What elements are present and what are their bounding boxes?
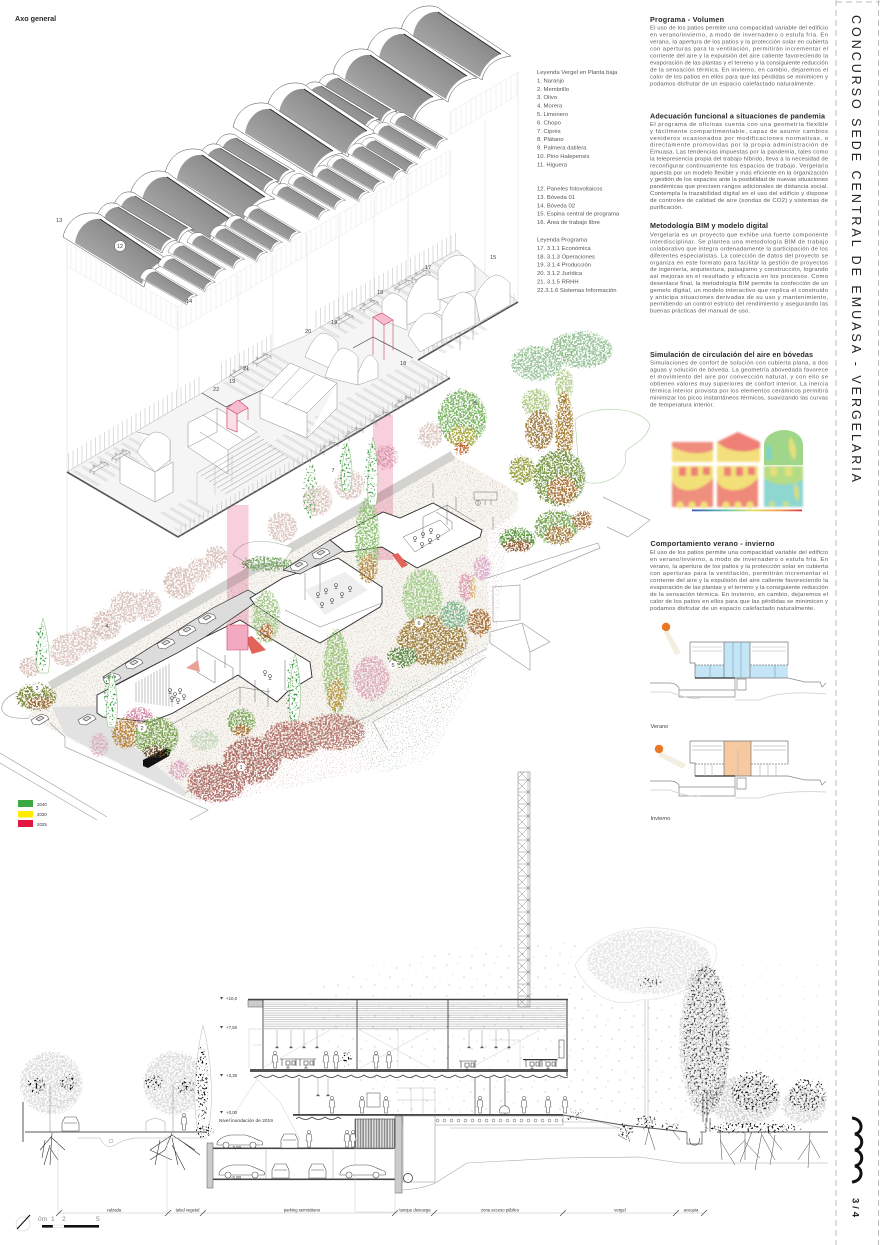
text block: Programa - Volumen <box>650 15 829 88</box>
chairs south <box>168 670 272 704</box>
chairs middle <box>316 584 352 608</box>
text block: Adecuación funcional: reconfigurar continuamente los espacios de trabajo. Vergelaria <box>650 163 829 169</box>
text block: Adecuación funcional: apuesta por un modelo flexible y más eficiente en la organización <box>650 170 828 176</box>
text block: Metodología BIM: así mejoras en el resultado y eficacia en los procesos. Como <box>650 274 829 280</box>
perimeter ticks <box>67 232 518 537</box>
white canopy blob with fringe <box>233 541 294 571</box>
text block: Simulación de circulación: aguas y solución de bóveda. La geometría abovedada favorece <box>650 368 829 374</box>
legend: planting and programme: 8. Plátano <box>537 137 564 143</box>
legend: planting and programme: Leyenda Vergel en Planta baja <box>537 70 618 76</box>
roof facade <box>67 72 518 330</box>
tree labels: 5 <box>391 663 395 669</box>
phasing colour legend: 2030 <box>37 812 47 817</box>
text block: Metodología BIM: Metodología BIM y modelo digital <box>650 221 768 230</box>
desk rows <box>72 257 490 532</box>
vault upper <box>764 430 803 465</box>
street <box>23 1102 207 1146</box>
floor and roof numbers: 18 <box>377 290 383 296</box>
level markers: -5,80 <box>231 1175 242 1180</box>
phasing colour legend <box>18 800 47 827</box>
floor and roof numbers: 19 <box>229 379 235 385</box>
north arrow <box>16 1215 30 1231</box>
office plant <box>342 1052 354 1064</box>
scale bar <box>38 1216 100 1228</box>
right ground line and acequia <box>450 1115 828 1145</box>
transmission tower <box>518 772 530 1007</box>
text block: Comportamiento verano - invierno: El uso de los patios permite una compacidad variable del edificio <box>650 550 829 556</box>
text block: Metodología BIM: y anticipa situaciones derivadas de su uso y mantenimiento, <box>650 295 828 301</box>
grey floor middle <box>305 572 368 615</box>
tree 1 large pink canopy <box>188 714 366 802</box>
legend: planting and programme: 13. Bóveda 01 <box>537 195 575 201</box>
heading: Axo general: Axo general <box>15 14 56 23</box>
flat roof lower <box>672 466 713 508</box>
roots left <box>40 1133 200 1170</box>
legend: planting and programme: 22.3.1.6 Sistemas Información <box>537 288 617 294</box>
ground floor site <box>0 332 650 820</box>
shaft base <box>227 625 248 650</box>
text block: Adecuación funcional: Contempla la trazabilidad digital en el uso del edificio y dispone <box>650 191 829 197</box>
shrub right one <box>709 1072 781 1124</box>
scale bar: 0m <box>38 1216 47 1223</box>
text block: Adecuación funcional <box>650 112 829 211</box>
text block: Metodología BIM <box>650 221 829 315</box>
text block: Simulación de circulación: el movimiento del aire por convección natural, y con ello se <box>650 375 829 381</box>
ground plants right <box>567 1110 805 1136</box>
section zone labels <box>107 1208 699 1212</box>
tree labels: 2 <box>140 726 144 732</box>
roots right <box>618 1125 820 1170</box>
red stairs <box>245 553 408 654</box>
ground speckle <box>28 455 518 806</box>
legend: planting and programme: 19. 3.1.4 Producción <box>537 263 591 269</box>
legend: planting and programme: 16. Área de trabajo libre <box>537 219 601 226</box>
text block: Metodología BIM: diferentes especialistas. La colección de datos del proyecto se <box>650 253 829 259</box>
text block: Comportamiento verano - invierno: Comportamiento verano - invierno <box>650 539 775 548</box>
legend: planting and programme: 1. Naranjo <box>537 78 565 84</box>
dimension line <box>56 1135 707 1216</box>
text block: Metodología BIM: Vergelaria es un proyecto que exhibe una fuerte componente <box>650 233 829 239</box>
text block: Metodología BIM: desenlace final, la metodología BIM permite la confección de un <box>650 281 828 287</box>
terrain curve <box>402 1157 828 1190</box>
middle block <box>250 540 382 643</box>
floor and roof numbers: 17 <box>425 265 431 271</box>
tree 5 and 6 cluster <box>388 569 492 667</box>
text block: Adecuación funcional: Adecuación funcional a situaciones de pandemia <box>650 112 826 120</box>
diagram: winter behaviour <box>650 741 826 798</box>
sun summer <box>662 623 670 631</box>
building section winter <box>690 741 788 776</box>
upper vault row <box>63 6 511 287</box>
interior lines winter <box>692 746 786 776</box>
text block: Simulación de circulación: obtienen valores muy superiores de confort interior. La inercia <box>650 382 829 388</box>
legend: planting and programme: 11. Higuera <box>537 162 568 168</box>
section zone labels: parking semisótano <box>284 1208 321 1212</box>
text block: Programa - Volumen: El uso de los patios permite una compacidad variable del edificio <box>650 26 829 32</box>
pink service shafts <box>227 415 393 650</box>
legend: planting and programme: 20. 3.1.2 Jurídica <box>537 271 583 277</box>
poplar tree <box>680 964 731 1122</box>
sky stipple right <box>560 960 830 1120</box>
legend: planting and programme: 17. 3.1.1 Económica <box>537 246 591 252</box>
scale bar: 2 <box>62 1216 66 1223</box>
building section <box>21 772 830 1216</box>
plaza furniture <box>433 483 497 530</box>
cypress section <box>195 1025 216 1137</box>
text block: Simulación de circulación: minimizar los picos instantáneos térmicos, suavizando las curvas <box>650 396 828 402</box>
shelving stacks <box>197 436 288 505</box>
roof numbers: 12 <box>117 244 123 250</box>
text block: Simulación de circulación: térmica interior provista por los elementos cerámicos permitirá <box>650 389 829 395</box>
tree labels: 4 <box>105 624 109 630</box>
ground floor of building <box>293 1078 568 1125</box>
legend: planting and programme: 2. Membrillo <box>537 87 570 93</box>
flat roof upper <box>672 442 713 462</box>
gable roof lower <box>717 466 758 508</box>
building upper floor <box>230 1000 568 1140</box>
section zone labels: zona acceso público <box>481 1208 520 1212</box>
roof numbers <box>56 218 192 305</box>
wall trees <box>20 423 443 677</box>
text block: Simulación de circulación <box>650 350 829 409</box>
ground and basement summer <box>650 678 826 700</box>
slab <box>67 250 518 537</box>
rooms <box>120 290 473 502</box>
legend: planting and programme: 12. Paneles fotovoltaicos <box>537 186 603 192</box>
slab edge <box>67 302 518 537</box>
floor and roof numbers: 19 <box>331 320 337 326</box>
office vaults <box>137 255 510 472</box>
diagram: summer behaviour <box>650 623 826 700</box>
pink garden planting <box>91 556 492 780</box>
text block: Adecuación funcional: purificación. <box>650 205 683 211</box>
text block: Metodología BIM: organiza en este formato para facilitar la gestión de proyectos <box>650 260 828 266</box>
text block: Comportamiento verano - invierno: corriente del aire y la expulsión del aire caliente favoreciendo la <box>650 578 829 584</box>
level markers: +10,0 <box>226 996 238 1001</box>
street cars and pedestrian <box>62 1113 187 1132</box>
shaft on floor <box>227 313 393 432</box>
tree labels: 6 <box>417 621 421 627</box>
floor and roof numbers: 18 <box>400 361 406 367</box>
legend: planting and programme <box>537 70 620 294</box>
tree labels: 7 <box>331 468 335 474</box>
shrub right two <box>783 1079 828 1123</box>
text block: Programa - Volumen: evaporación de las plantas y el terreno y la consiguiente reducción <box>650 61 828 67</box>
text block: Simulación de circulación: Simulación de circulación del aire en bóvedas <box>650 350 813 359</box>
section zone labels: acequia <box>684 1208 699 1212</box>
text block: Comportamiento verano - invierno: de la sensación térmica. En invierno, en cambio, dejaremos el <box>650 592 828 598</box>
level markers <box>220 996 242 1180</box>
floor and roof numbers <box>213 255 496 393</box>
phasing colour legend: 2025 <box>37 822 47 827</box>
text block: Programa - Volumen: con aperturas para la ventilación, permitirán incrementar el <box>650 47 828 53</box>
text block: Metodología BIM: permitiendo un control estricto del rendimiento y asegurando las <box>650 302 828 308</box>
text block: Comportamiento verano - invierno: evaporación de las plantas y el terreno y la consiguiente reducción <box>650 585 828 591</box>
text block: Comportamiento verano - invierno: verano, la apertura de los patios y la protección solar en cubierta <box>650 564 829 570</box>
text block: Adecuación funcional: de controles de calidad de aire (sondas de CO2) y sistemas de <box>650 198 829 204</box>
scale bar: 5 <box>96 1216 100 1223</box>
desks <box>90 269 430 475</box>
text block: Adecuación funcional: El programa de oficinas cuenta con una geometría flexible <box>650 122 829 128</box>
tree small centre <box>228 709 256 736</box>
text block: Metodología BIM: interdisciplinar. Se plantea una metodología BIM de trabajo <box>650 240 829 246</box>
legend: planting and programme: 18. 3.1.3 Operaciones <box>537 254 595 260</box>
sky stipple <box>300 940 700 1115</box>
black cars <box>143 748 171 768</box>
text block: Programa - Volumen: calor de los patios en ellos para que las pérdidas se minimicen y <box>650 75 828 81</box>
label: Verano: Verano <box>650 724 668 730</box>
section zone labels: vergel <box>614 1208 626 1212</box>
tree labels: 1 <box>239 765 243 771</box>
text block: Programa - Volumen: podamos disfrutar de un espacio calefactado naturalmente. <box>650 82 815 88</box>
cypress foliage <box>37 440 379 727</box>
text block: Comportamiento verano - invierno: en verano/invierno, a modo de invernadero o estufa fría. En <box>650 557 828 563</box>
logo wave <box>852 1118 862 1182</box>
notch lines <box>202 337 413 407</box>
level markers: +7,50 <box>226 1025 238 1030</box>
parked cars <box>31 548 330 725</box>
site outlines <box>0 497 650 820</box>
phasing colour legend: 2040 <box>37 802 47 807</box>
tree 3 cluster <box>17 684 57 710</box>
cypress trees <box>37 437 378 727</box>
sun beam summer <box>664 630 681 655</box>
text block: Comportamiento verano - invierno: calor de los patios en ellos para que las pérdidas se minimicen y <box>650 599 828 605</box>
text block: Programa - Volumen: Programa - Volumen <box>650 15 724 24</box>
section zone labels: tanque descarga <box>399 1208 431 1212</box>
first floor plan <box>67 232 518 537</box>
palm tree <box>510 332 613 506</box>
legend: planting and programme: 6. Chopo <box>537 120 562 126</box>
dashed page frame <box>836 0 880 1245</box>
text block: Simulación de circulación: Simulaciones de confort de solución con cubierta plana, a dos <box>650 361 828 367</box>
page number: 3/4 <box>850 1198 860 1218</box>
legend: planting and programme: 7. Ciprés <box>537 129 561 135</box>
left tree one <box>21 1052 83 1132</box>
text block: Comportamiento verano - invierno: con aperturas para la ventilación, permitirán incrementar el <box>650 571 828 577</box>
legend: planting and programme: 15. Espina central de programa <box>537 212 620 218</box>
roof numbers: 13 <box>56 218 62 224</box>
legend: planting and programme: 9. Palmera datilera <box>537 146 587 152</box>
south block <box>97 590 312 727</box>
tree labels: 8 <box>473 401 477 407</box>
text block: Comportamiento verano - invierno: podamos disfrutar de un espacio calefactado naturalmente. <box>650 606 815 612</box>
text block: Adecuación funcional: Emuasa. Las tendencias impuestas por la pandemia, tales como <box>650 150 829 156</box>
text block: Adecuación funcional: y gestión de los espacios ante la posibilidad de nuevas situaciones <box>650 177 828 183</box>
temperature scale bar <box>692 510 802 511</box>
tree labels: 3 <box>35 686 39 692</box>
text block: Comportamiento verano - invierno <box>650 539 829 612</box>
text block: Metodología BIM: buenas prácticas del manual de uso. <box>650 309 750 315</box>
text block: Adecuación funcional: venideros ocasionados por modificaciones normativas, o <box>650 136 829 142</box>
lower vault row <box>140 113 448 305</box>
floor and roof numbers: 21 <box>243 366 249 372</box>
text block: Adecuación funcional: pandémicas que precisen rangos adicionales de distancia social. <box>650 184 828 190</box>
vertical project title: CONCURSO SEDE CENTRAL DE EMUASA - VERGELARIA <box>849 15 863 483</box>
text block: Metodología BIM: de ingeniería, arquitectura, paisajismo y construcción, logrando <box>650 267 829 273</box>
flood level note: Nivel inundación de 2019 <box>219 1118 273 1124</box>
vaulted roof <box>56 6 518 330</box>
section zone labels: calzada <box>107 1208 122 1212</box>
building section summer <box>690 642 788 678</box>
level markers: -3,00 <box>231 1145 242 1150</box>
legend: planting and programme: 3. Olivo <box>537 95 558 101</box>
text block: Adecuación funcional: la telepresencia propia del trabajo híbrido, lleva a la necesidad de <box>650 156 829 162</box>
north trees cluster <box>439 390 593 552</box>
level markers: +0,00 <box>226 1110 238 1115</box>
text block: Programa - Volumen: de la sensación térmica. En invierno, en cambio, dejaremos el <box>650 68 828 74</box>
thermal simulation heatmaps <box>672 430 803 511</box>
warm air fill <box>724 741 751 776</box>
text block: Adecuación funcional: directamente promovidas por la propia administración de <box>650 143 829 149</box>
level markers: +3,30 <box>226 1073 238 1078</box>
text block: Metodología BIM: colaborativo que integra ordenadamente la participación de los <box>650 246 828 252</box>
upper floor furniture and people <box>272 1040 564 1070</box>
gable roof upper <box>717 432 760 462</box>
vault lower <box>764 466 803 507</box>
floor and roof numbers: 22 <box>213 387 219 393</box>
legend: planting and programme: Leyenda Programa <box>537 238 588 244</box>
legend: planting and programme: 4. Morera <box>537 104 563 110</box>
scale bar: 1 <box>51 1216 55 1223</box>
text block: Simulación de circulación: de temperatura interior. <box>650 403 714 409</box>
cool air fill <box>695 642 788 678</box>
tree labels <box>32 401 477 772</box>
legend: planting and programme: 21. 3.1.5 RRHH <box>537 280 579 286</box>
screens room <box>135 663 173 707</box>
parking strip south <box>103 590 262 685</box>
garden wall band <box>50 455 453 686</box>
floor and roof numbers: 15 <box>490 255 496 261</box>
parking level <box>207 1116 435 1212</box>
text block: Adecuación funcional: y fácilmente compartimentable, capaz de asumir cambios <box>650 129 828 135</box>
roof numbers: 14 <box>186 299 192 305</box>
parking strip middle <box>283 540 345 574</box>
pine tree <box>575 928 716 1125</box>
floor and roof numbers: 20 <box>305 329 311 335</box>
room lines south <box>167 647 285 727</box>
pale outline tree <box>575 409 650 483</box>
text block: Programa - Volumen: en verano/invierno, a modo de invernadero o estufa fría. En <box>650 33 828 39</box>
text block: Programa - Volumen: corriente del aire y la expulsión del aire caliente favoreciendo la <box>650 54 829 60</box>
exploded axonometric <box>0 6 650 820</box>
pendant lamps <box>275 1030 511 1048</box>
legend: planting and programme: 10. Pino Halepensis <box>537 154 589 160</box>
sun winter <box>655 745 663 753</box>
label: Invierno: Invierno <box>650 816 670 822</box>
text block: Metodología BIM: gemelo digital, un modelo interactivo que replica el construido <box>650 288 829 294</box>
interior lines summer <box>692 642 786 678</box>
ground and basement winter <box>650 776 826 798</box>
climbing vines <box>253 498 380 714</box>
legend: planting and programme: 14. Bóveda 02 <box>537 203 575 209</box>
legend: planting and programme: 5. Limonero <box>537 112 569 118</box>
tree 2 cluster <box>113 708 179 758</box>
section zone labels: talud vegetal <box>176 1208 199 1212</box>
text block: Programa - Volumen: verano, la apertura de los patios y la protección solar en cubierta <box>650 40 829 46</box>
grey sidewalk <box>52 706 185 797</box>
north block <box>330 503 482 568</box>
sun beam winter <box>658 752 686 769</box>
vertical construction lines <box>67 72 518 640</box>
left tree two <box>144 1052 206 1132</box>
